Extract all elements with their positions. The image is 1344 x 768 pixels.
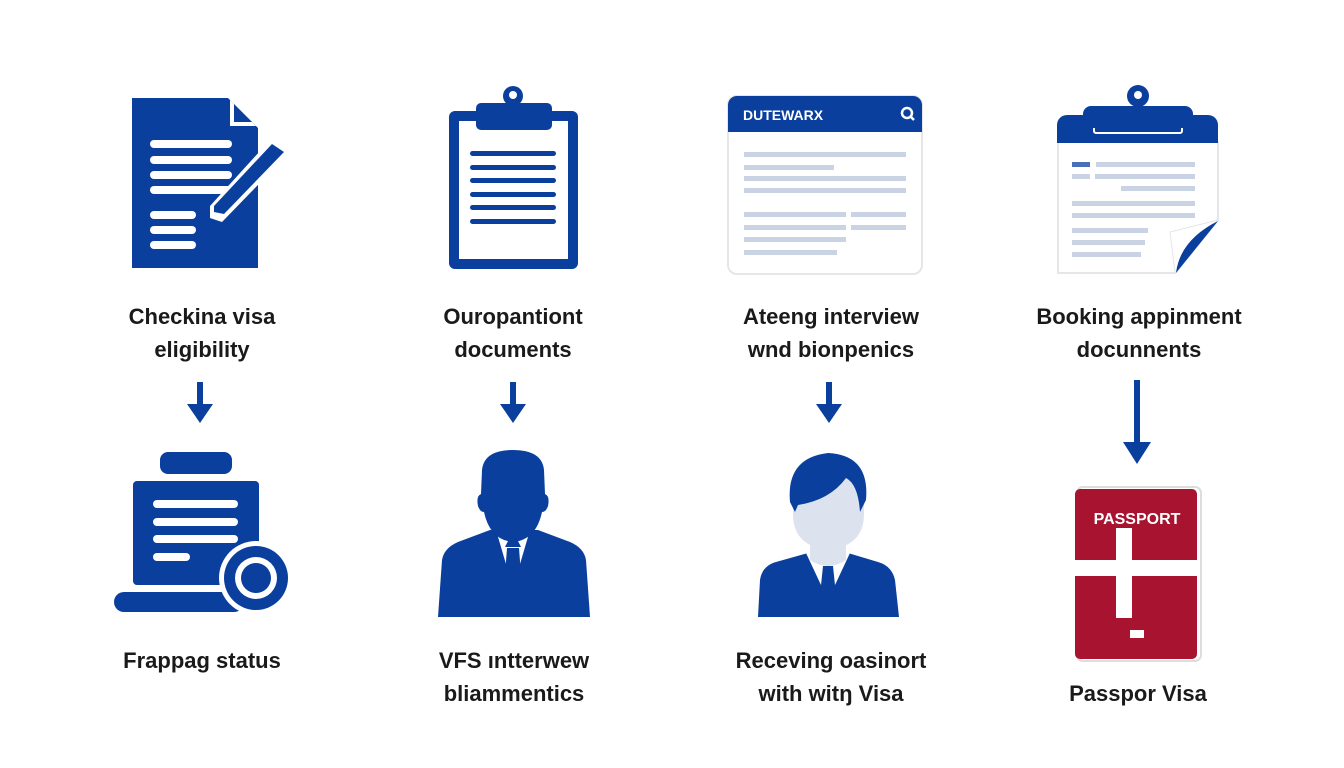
label: step 8: Passpor Visa <box>1069 681 1207 706</box>
label: step 6: bliammentics <box>444 681 584 706</box>
label: step 1: Checkina visa <box>129 304 275 329</box>
label: step 1: eligibility <box>154 337 250 362</box>
label: step 6 <box>439 648 590 706</box>
arrow 1 <box>187 382 213 423</box>
icon: passport <box>1075 487 1201 661</box>
icon: browser window: DUTEWARX <box>743 107 824 123</box>
arrow 3 <box>816 382 842 423</box>
label: step 2: documents <box>454 337 572 362</box>
label: step 4: Booking appinment <box>1036 304 1242 329</box>
icon: passport: PASSPORT <box>1094 511 1181 528</box>
icon: clipboard <box>449 86 578 269</box>
arrow 2 <box>500 382 526 423</box>
label: step 6: VFS ıntterwew <box>439 648 589 673</box>
icon: browser window <box>728 96 922 274</box>
icon: tracking document with stamp <box>114 452 293 615</box>
icon: person with face <box>758 453 899 617</box>
label: step 7 <box>736 648 926 706</box>
icon: person silhouette <box>438 450 590 617</box>
label: step 3: wnd bionpenics <box>748 337 914 362</box>
arrow 4 <box>1123 380 1151 464</box>
icon: document with pencil <box>132 98 290 268</box>
label: step 2 <box>443 304 583 362</box>
icon: clipboard with folded corner <box>1057 85 1218 273</box>
label: step 4: docunnents <box>1077 337 1201 362</box>
label: step 5: Frappag status <box>123 648 281 673</box>
label: step 2: Ouropantiont <box>443 304 583 329</box>
label: step 3: Ateeng interview <box>743 304 919 329</box>
label: step 7: with witŋ Visa <box>758 681 904 706</box>
label: step 1 <box>129 304 276 362</box>
label: step 3 <box>743 304 919 362</box>
label: step 7: Receving oasinort <box>736 648 926 673</box>
label: step 4 <box>1036 304 1242 362</box>
